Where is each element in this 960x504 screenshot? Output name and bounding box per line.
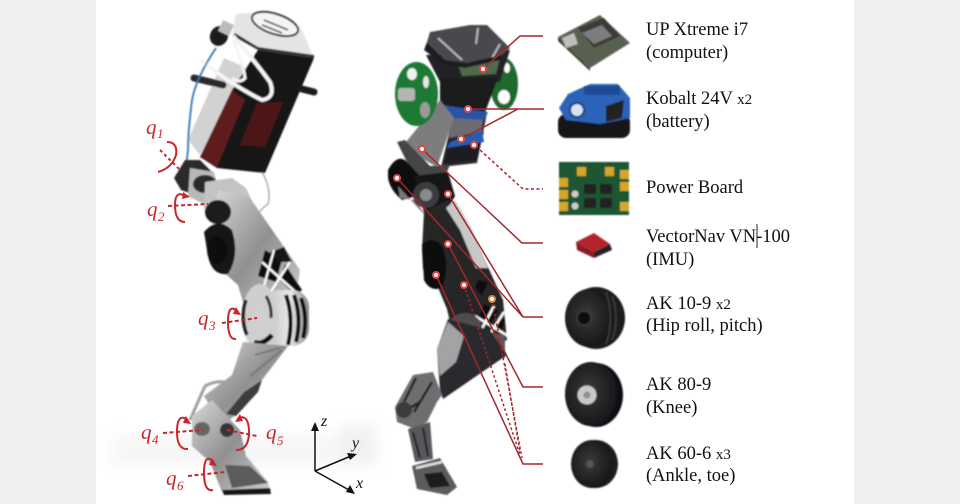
label: hip motors: (Hip roll, pitch)	[646, 316, 763, 336]
joint q3	[198, 306, 257, 339]
joint q1: 1	[157, 126, 164, 141]
battery blue stripes	[442, 105, 488, 120]
component thumbnails	[558, 15, 630, 488]
hip motor leaders	[397, 178, 543, 317]
thigh silver	[212, 190, 300, 312]
computer leader	[483, 36, 543, 69]
joint q3: 3	[208, 318, 216, 333]
joint q4	[141, 416, 203, 449]
callout dots	[394, 66, 495, 302]
grey leg plate	[398, 186, 430, 220]
label: power board: Power Board	[646, 178, 744, 198]
joint q5: q	[266, 420, 277, 444]
thigh dark	[422, 200, 507, 356]
joint q2: 2	[158, 209, 165, 224]
knee motor leader	[448, 244, 543, 387]
lattice	[475, 280, 508, 336]
silver frame	[402, 100, 454, 167]
thigh black motors	[204, 200, 235, 274]
coordinate axes: y	[350, 435, 360, 452]
joint q4: 4	[152, 432, 159, 447]
knee block	[448, 313, 482, 343]
callout lines	[397, 36, 544, 464]
torso black body	[200, 50, 314, 173]
blue wire	[180, 48, 216, 186]
torso red panel	[240, 102, 283, 147]
joint q2: q	[147, 197, 158, 221]
right robot render	[388, 25, 518, 495]
joint markers	[141, 115, 284, 493]
ankle linkage	[395, 372, 442, 429]
icon: power board	[559, 162, 629, 215]
torso red stripe	[200, 90, 245, 167]
IMU leader	[422, 149, 543, 243]
hip disc	[413, 172, 455, 212]
torso bars	[194, 78, 314, 92]
joint q4: q	[141, 420, 152, 444]
hip bracket	[397, 140, 450, 178]
thigh silver strip	[446, 200, 488, 268]
joint q6: q	[166, 466, 177, 490]
lower bay	[441, 113, 487, 167]
joint q5	[227, 414, 284, 450]
joint q6: 6	[177, 478, 184, 493]
joint q3: q	[198, 306, 209, 330]
label: IMU: (IMU)	[646, 250, 694, 270]
middle black body	[440, 78, 498, 115]
label: computer: UP Xtreme i7	[646, 20, 748, 40]
white page panel	[96, 0, 854, 504]
joint q1	[146, 115, 180, 172]
faint floor background	[112, 425, 377, 466]
shin wedge	[437, 319, 507, 399]
icon: AK 10-9 motor	[565, 287, 625, 349]
lower shank bars	[408, 422, 433, 462]
coordinate axes: x	[355, 475, 363, 492]
label: knee motor: AK 80-9	[646, 375, 711, 395]
foot	[412, 458, 457, 495]
coordinate axes: z	[320, 413, 328, 430]
upper electronics	[426, 50, 510, 82]
icon: AK 60-6 motor	[571, 440, 618, 488]
joint q1: q	[146, 115, 157, 139]
joint q5: 5	[277, 433, 284, 448]
left robot photo	[174, 7, 314, 495]
icon: battery	[558, 84, 630, 138]
icon: computer	[558, 15, 630, 71]
white handle	[201, 36, 272, 100]
label: battery: Kobalt 24V x2	[646, 89, 752, 109]
label: hip motors: AK 10-9 x2	[646, 294, 731, 314]
left green wheel	[395, 62, 438, 126]
icon: IMU	[576, 233, 612, 258]
right green wheel	[490, 58, 518, 110]
power board leader	[480, 150, 543, 189]
label: IMU: VectorNav VN-100	[646, 227, 790, 247]
hip motor black lower	[422, 240, 446, 289]
ankle and foot	[192, 400, 271, 495]
thigh lattice	[258, 247, 302, 296]
battery leaders	[461, 109, 544, 139]
label: computer: (computer)	[646, 43, 728, 63]
label: knee motor: (Knee)	[646, 398, 697, 418]
label: battery: (battery)	[646, 112, 710, 132]
icon: AK 80-9 motor	[565, 362, 623, 427]
label: ankle toe motors: (Ankle, toe)	[646, 466, 735, 486]
torso top cover	[232, 7, 314, 58]
coordinate axes	[311, 413, 363, 494]
camera	[207, 23, 231, 49]
label: ankle toe motors: AK 60-6 x3	[646, 444, 731, 464]
torso silver side panel	[188, 58, 247, 155]
top plate	[424, 25, 510, 68]
ankle toe motor leaders	[436, 275, 543, 464]
joint q6	[166, 458, 225, 493]
knee housing	[242, 284, 309, 350]
shin	[204, 342, 288, 426]
hip black motor	[388, 159, 420, 200]
joint q2	[147, 192, 208, 224]
hip assembly	[174, 160, 269, 226]
component labels	[646, 20, 790, 486]
